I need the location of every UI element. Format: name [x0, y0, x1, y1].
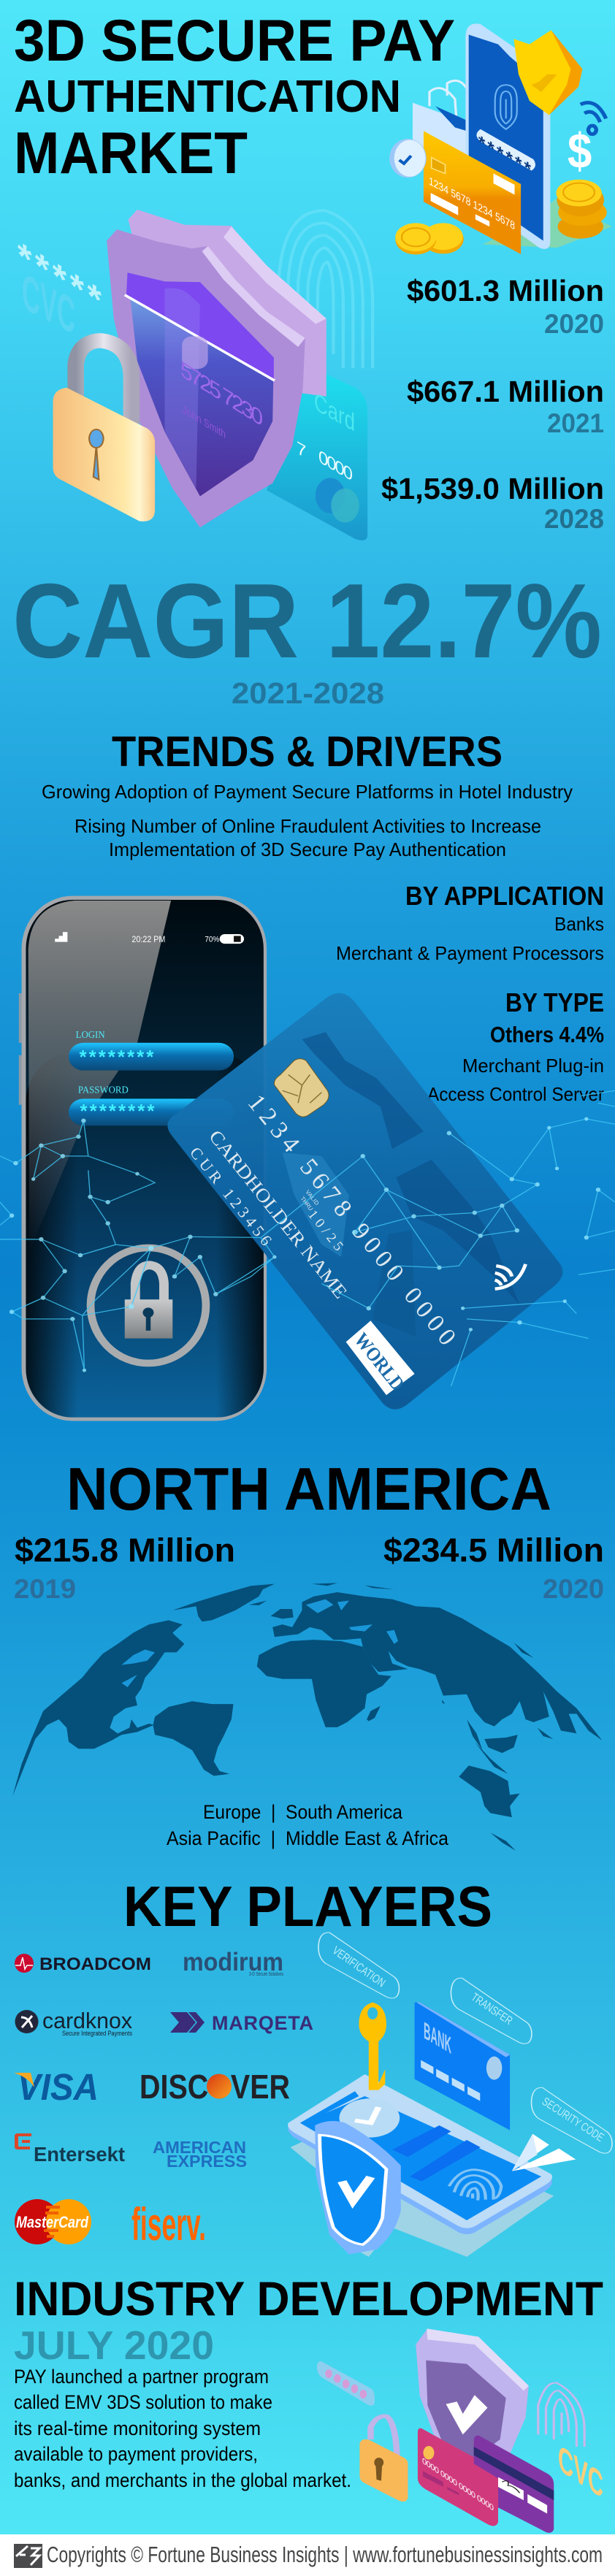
dollar sign: $: [568, 124, 592, 179]
illustration: credit card: THRU: [299, 1196, 314, 1212]
north america: [12, 1620, 184, 1796]
floating label text: [330, 1944, 606, 2144]
2028 year: 2028: [544, 504, 604, 534]
card word: Card: [314, 386, 355, 437]
africa: [257, 1640, 391, 1727]
world map: [12, 1583, 602, 1851]
check badge: [389, 139, 427, 177]
fingerprint: [278, 210, 373, 368]
login field: ********: [79, 1046, 154, 1068]
eurasia: [272, 1592, 602, 1740]
purple credit card: [474, 2436, 554, 2533]
login field: [69, 1030, 234, 1071]
logo: Visa: VISA: [18, 2066, 99, 2108]
islands: [271, 1583, 553, 1774]
card number: 1234 5678 1234 5678: [429, 175, 515, 233]
paper plane: [512, 2134, 576, 2171]
glass card number: 0000: [318, 447, 353, 486]
padlock: [53, 340, 155, 521]
bank card: [415, 2003, 510, 2130]
logo: Cardknox: [15, 2008, 132, 2037]
CVC faded: CVC: [22, 262, 75, 345]
status bar: 20:22 PM: [131, 934, 165, 944]
footer logo: [14, 2544, 42, 2568]
logo: Marqeta: MARQETA: [212, 2012, 313, 2034]
driver 1: Growing Adoption of Payment Secure Platforms in Hotel Industry: [42, 781, 573, 803]
other regions: Europe | South America: [203, 1801, 403, 1823]
logo: American Express: AMERICAN: [153, 2138, 246, 2157]
stars: *****: [18, 234, 102, 323]
glass card digit: 7: [297, 438, 306, 462]
gold credit card: [424, 131, 521, 254]
by application: [336, 881, 604, 964]
2028 value: $1,539.0 Million: [381, 472, 604, 505]
other regions: Asia Pacific | Middle East & Africa: [167, 1827, 449, 1849]
chip: [274, 1059, 329, 1117]
front shield: [107, 229, 305, 527]
fingerprint: [538, 2382, 584, 2447]
CAGR period: 2021-2028: [232, 676, 384, 710]
logo: Cardknox: Secure Integrated Payments: [62, 2030, 132, 2037]
pink credit card: [418, 2428, 498, 2526]
title: AUTHENTICATION: [14, 72, 401, 122]
shopping bag: [413, 80, 467, 170]
title: 3D SECURE PAY: [14, 8, 455, 74]
password field: [69, 1085, 234, 1125]
illustration: shield, padlock and card: [18, 210, 373, 540]
footer bar: [0, 2534, 615, 2576]
values: market size: [381, 274, 604, 534]
glass card: [267, 364, 367, 540]
by application: Merchant & Payment Processors: [336, 942, 604, 964]
by application: Banks: [554, 913, 604, 935]
by type: BY TYPE: [505, 987, 604, 1017]
by type: Access Control Server: [427, 1083, 604, 1105]
2020 value: $234.5 Million: [383, 1532, 604, 1569]
2021 value: $667.1 Million: [407, 375, 604, 408]
driver 2: [75, 815, 541, 860]
nfc waves: [495, 1264, 526, 1289]
2020 value: $601.3 Million: [407, 274, 604, 307]
greenland: [172, 1584, 275, 1621]
illustration: phone security key and bank card: BANK: [424, 2017, 451, 2059]
phone plate: [288, 2074, 552, 2234]
logo: Fiserv: fiserv.: [131, 2199, 206, 2250]
password field: ********: [80, 1100, 155, 1122]
floating label text: VERIFICATION: [330, 1944, 387, 1990]
title: [14, 8, 455, 186]
by type: Merchant Plug-in: [462, 1055, 604, 1077]
wifi icon: [581, 103, 606, 134]
illustration: credit card: CUR 123456: [186, 1144, 275, 1249]
logo: Modirum: 3-D Secure Solutions: [249, 1972, 283, 1977]
development text: PAY launched a partner program: [14, 2366, 269, 2388]
illustration: phone payment with coins: [389, 23, 612, 254]
gold shield: [513, 30, 582, 115]
development text: banks, and merchants in the global market.: [14, 2469, 351, 2491]
company logos: [14, 1948, 313, 2250]
shield cardholder: John Smith: [183, 403, 226, 441]
development text: called EMV 3DS solution to make: [14, 2391, 272, 2413]
2019 year: 2019: [14, 1574, 76, 1604]
logo: American Express: EXPRESS: [167, 2152, 247, 2171]
segment lists: [336, 881, 604, 1105]
illustration: credit card: VALID: [304, 1189, 321, 1207]
illustration: shield, lock and cards: [317, 2328, 603, 2533]
lock badge: [91, 1247, 206, 1363]
rear shield layer: [129, 210, 326, 397]
illustration: phone security key and bank card: [288, 1933, 612, 2257]
development text: [14, 2366, 351, 2491]
2020 year: 2020: [543, 1574, 604, 1604]
logo: Cardknox: cardknox: [42, 2008, 132, 2033]
padlock: [359, 2416, 408, 2502]
illustration: credit card: CARDHOLDER NAME: [205, 1126, 351, 1303]
plate shadow: [290, 2113, 554, 2257]
heading: trends and drivers: TRENDS & DRIVERS: [112, 728, 503, 776]
by type: [427, 987, 604, 1105]
shield with check: [315, 2121, 401, 2255]
fingerprint: [449, 2170, 501, 2201]
world tag: [346, 1321, 415, 1395]
heading: key players: KEY PLAYERS: [123, 1874, 492, 1938]
logo: MasterCard: MasterCard: [16, 2213, 88, 2231]
logo: Modirum: modirum: [183, 1948, 283, 1976]
pink card number: 0000 0000 0000 0000: [422, 2455, 494, 2513]
illustration: credit card: WORLD: [350, 1329, 409, 1395]
illustration: credit card: 10/25: [305, 1207, 346, 1254]
heading: north america: NORTH AMERICA: [66, 1455, 551, 1523]
logo: Entersekt: Entersekt: [34, 2143, 125, 2166]
date: JULY 2020: [14, 2323, 214, 2368]
australia: [459, 1765, 520, 1817]
status bar: 70%: [205, 936, 220, 944]
network mesh overlay: [0, 1090, 615, 1386]
check circle: [340, 2098, 400, 2138]
driver 2: Rising Number of Online Fraudulent Activities to Increase: [75, 815, 541, 837]
illustration: smartphone login: [19, 896, 267, 1421]
illustration: credit card: [167, 993, 562, 1410]
stars pill: [317, 2361, 375, 2406]
shield card number: 5725 7230: [180, 356, 263, 432]
2021 year: 2021: [547, 408, 604, 438]
logo: Entersekt: [15, 2133, 125, 2166]
title: MARKET: [14, 121, 248, 186]
purple shield: [416, 2328, 529, 2464]
key: [359, 2003, 386, 2090]
logo: American Express: [153, 2138, 247, 2171]
other regions: [167, 1801, 449, 1849]
logo: MasterCard: [15, 2199, 91, 2244]
development text: its real-time monitoring system: [14, 2418, 261, 2439]
2020 year: 2020: [544, 309, 604, 339]
logo: Broadcom: BROADCOM: [39, 1954, 151, 1974]
status bar: [55, 932, 244, 944]
coin stacks: [395, 180, 607, 254]
development text: available to payment providers,: [14, 2443, 258, 2465]
password field: PASSWORD: [78, 1085, 129, 1096]
login field: LOGIN: [76, 1030, 105, 1041]
logo: Discover: DISCOVER: [140, 2068, 290, 2106]
floating labels: [318, 1933, 612, 2153]
2019 value: $215.8 Million: [15, 1532, 235, 1569]
password stars: ******: [478, 132, 531, 180]
south america: [153, 1701, 234, 1776]
illustration: credit card: 1234 5678 9000 0000: [242, 1090, 461, 1350]
driver 2: Implementation of 3D Secure Pay Authentication: [109, 838, 506, 860]
phone: [465, 23, 550, 249]
floating label text: TRANSFER: [469, 1991, 514, 2027]
